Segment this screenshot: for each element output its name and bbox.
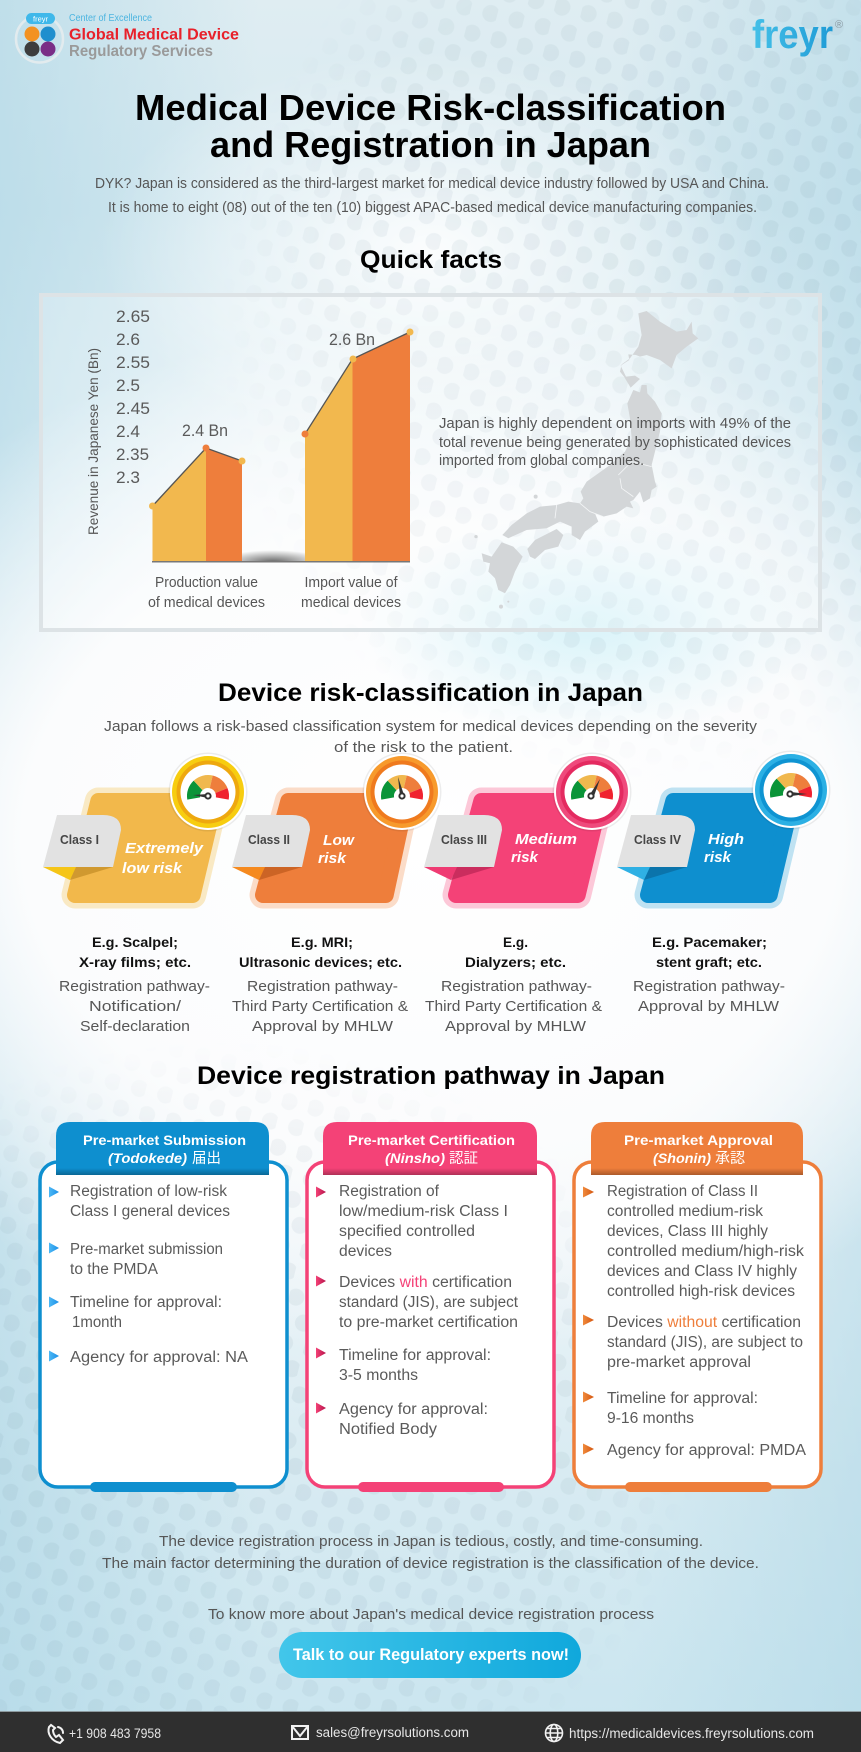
y axis ticks bbox=[116, 307, 150, 487]
intro text: It is home to eight (08) out of the ten (10) biggest APAC-based medical device manufacturing companies. bbox=[108, 199, 757, 216]
header: Pre-market Submission bbox=[83, 1132, 246, 1148]
closing text: The device registration process in Japan is tedious, costly, and time-consuming. bbox=[159, 1533, 703, 1550]
call to action text: To know more about Japan's medical device registration process bbox=[208, 1606, 654, 1623]
import dependence text bbox=[439, 415, 791, 469]
closing text bbox=[102, 1533, 759, 1572]
y axis ticks: 2.4 bbox=[116, 422, 140, 441]
risk label: Low bbox=[323, 832, 355, 849]
tab: Class II: Class II bbox=[248, 833, 290, 847]
button: talk to experts: Talk to our Regulatory experts now! bbox=[293, 1645, 569, 1664]
x axis labels: of medical devices bbox=[148, 594, 265, 611]
bars: production value bbox=[149, 421, 246, 562]
class I details: E.g. Scalpel; bbox=[92, 934, 178, 950]
list: 3-5 months bbox=[339, 1367, 418, 1384]
x axis labels bbox=[148, 574, 401, 611]
tab: Class II bbox=[232, 815, 310, 867]
class II details: E.g. MRI; bbox=[291, 934, 353, 950]
header: Pre-market Certification bbox=[348, 1132, 515, 1148]
heading: quick facts: Quick facts bbox=[360, 246, 502, 274]
panel: pre-market approval bbox=[574, 1122, 821, 1492]
list: devices, Class III highly bbox=[607, 1223, 768, 1240]
risk label: risk bbox=[511, 849, 539, 866]
class III details: Approval by MHLW bbox=[445, 1018, 587, 1035]
website: https://medicaldevices.freyrsolutions.com bbox=[569, 1726, 814, 1741]
closing text: The main factor determining the duration of device registration is the classification of the device. bbox=[102, 1555, 759, 1572]
panel: pre-market certification bbox=[307, 1122, 554, 1492]
y axis title: Revenue in Japanese Yen (Bn) bbox=[86, 348, 101, 535]
tab: Class III bbox=[424, 815, 502, 867]
logo: freyr: freyr bbox=[752, 13, 833, 57]
icon: gauge bbox=[362, 752, 442, 832]
panel: pre-market submission bbox=[40, 1122, 287, 1492]
class I details: Notification/ bbox=[89, 998, 182, 1015]
icon: gauge bbox=[752, 750, 830, 830]
x axis labels: medical devices bbox=[301, 594, 401, 611]
list: devices and Class IV highly bbox=[607, 1263, 797, 1280]
class IV details: Registration pathway- bbox=[633, 978, 785, 995]
icon: phone bbox=[48, 1725, 63, 1743]
risk-classification description: of the risk to the patient. bbox=[334, 739, 513, 756]
tab: Class IV bbox=[617, 815, 695, 867]
list: pre-market approval bbox=[607, 1354, 751, 1371]
list: Notified Body bbox=[339, 1421, 437, 1438]
class I details bbox=[59, 934, 210, 1035]
header: 届出 bbox=[192, 1150, 221, 1167]
class III details bbox=[425, 934, 602, 1035]
class II details bbox=[232, 934, 408, 1035]
list: Registration of Class II bbox=[607, 1183, 758, 1200]
risk label bbox=[318, 832, 355, 867]
header: (Ninsho) bbox=[385, 1150, 445, 1166]
list bbox=[316, 1183, 519, 1438]
risk-classification description bbox=[104, 718, 758, 756]
icon: gauge bbox=[552, 752, 632, 832]
class I details: X-ray films; etc. bbox=[79, 954, 191, 970]
list: Timeline for approval: bbox=[70, 1294, 222, 1311]
email address: sales@freyrsolutions.com bbox=[316, 1725, 469, 1740]
intro text: DYK? Japan is considered as the third-largest market for medical device industry followed by USA and China. bbox=[95, 175, 769, 192]
list: 1month bbox=[72, 1314, 122, 1331]
risk card: Class IV bbox=[617, 750, 830, 895]
header: Pre-market Approval bbox=[624, 1132, 773, 1148]
icon: gauge bbox=[168, 752, 248, 832]
list: Registration of low-risk bbox=[70, 1183, 227, 1200]
risk label: Extremely bbox=[125, 840, 204, 857]
list bbox=[49, 1183, 249, 1366]
map of Japan bbox=[474, 311, 698, 609]
list: Agency for approval: NA bbox=[70, 1349, 249, 1366]
tab: Class I: Class I bbox=[60, 833, 99, 847]
list: Registration of bbox=[339, 1183, 440, 1200]
list: Pre-market submission bbox=[70, 1241, 223, 1258]
class I details: Registration pathway- bbox=[59, 978, 210, 995]
class I details: Self-declaration bbox=[80, 1018, 190, 1035]
y axis ticks: 2.65 bbox=[116, 307, 150, 326]
panel: quick facts bbox=[41, 295, 820, 630]
x axis labels: Import value of bbox=[304, 574, 398, 591]
header bbox=[56, 1122, 269, 1175]
risk label: risk bbox=[704, 849, 732, 866]
footer bbox=[0, 1711, 861, 1752]
class III details: Third Party Certification & bbox=[425, 998, 602, 1015]
button: talk to experts bbox=[279, 1632, 581, 1678]
class II details: Approval by MHLW bbox=[252, 1018, 394, 1035]
title: and Registration in Japan bbox=[210, 124, 651, 165]
logo: Global Medical Device Regulatory Services: freyr bbox=[33, 16, 49, 24]
heading: device risk-classification: Device risk-classification in Japan bbox=[218, 679, 643, 707]
header: 承認 bbox=[715, 1150, 746, 1167]
list: Agency for approval: bbox=[339, 1401, 488, 1418]
bar chart: revenue bbox=[86, 307, 414, 611]
y axis ticks: 2.55 bbox=[116, 353, 150, 372]
logo: Global Medical Device Regulatory Services: Regulatory Services bbox=[69, 43, 213, 60]
bars: import value: 2.6 Bn bbox=[329, 330, 375, 349]
list: Devices without certification bbox=[607, 1314, 801, 1331]
import dependence text: total revenue being generated by sophisticated devices bbox=[439, 434, 791, 451]
import dependence text: Japan is highly dependent on imports with 49% of the bbox=[439, 415, 791, 432]
class III details: Dialyzers; etc. bbox=[465, 954, 566, 970]
risk card: Class III bbox=[424, 752, 632, 895]
list: Timeline for approval: bbox=[339, 1347, 491, 1364]
header: (Shonin) bbox=[653, 1150, 711, 1166]
class IV details bbox=[633, 934, 785, 1015]
header: (Todokede) bbox=[108, 1150, 187, 1166]
import dependence text: imported from global companies. bbox=[439, 452, 644, 469]
risk label bbox=[122, 840, 204, 877]
list: low/medium-risk Class I bbox=[339, 1203, 508, 1220]
logo: Global Medical Device Regulatory Services: Global Medical Device bbox=[69, 26, 239, 44]
y axis ticks: 2.35 bbox=[116, 445, 149, 464]
class IV details: stent graft; etc. bbox=[656, 954, 762, 970]
list: Agency for approval: PMDA bbox=[607, 1442, 807, 1459]
header bbox=[323, 1122, 537, 1175]
risk card: Class I bbox=[43, 752, 248, 895]
list: controlled medium-risk bbox=[607, 1203, 763, 1220]
tab: Class III: Class III bbox=[441, 833, 487, 847]
list: 9-16 months bbox=[607, 1410, 694, 1427]
risk label bbox=[704, 831, 744, 866]
class IV details: Approval by MHLW bbox=[638, 998, 780, 1015]
class III details: Registration pathway- bbox=[441, 978, 592, 995]
logo: Global Medical Device Regulatory Services bbox=[16, 13, 239, 62]
risk label: High bbox=[708, 831, 744, 848]
intro text bbox=[95, 175, 769, 216]
y axis ticks: 2.5 bbox=[116, 376, 140, 395]
icon: email bbox=[292, 1726, 308, 1739]
bars: production value: 2.4 Bn bbox=[182, 421, 228, 440]
title: Medical Device Risk-classification bbox=[135, 87, 726, 128]
list bbox=[583, 1183, 807, 1459]
list: devices bbox=[339, 1243, 392, 1260]
header: 認証 bbox=[449, 1151, 478, 1167]
class IV details: E.g. Pacemaker; bbox=[652, 934, 767, 950]
list: controlled medium/high-risk bbox=[607, 1243, 804, 1260]
list: standard (JIS), are subject to bbox=[607, 1334, 803, 1351]
logo: freyr: ® bbox=[835, 19, 843, 31]
list: to the PMDA bbox=[70, 1261, 159, 1278]
class II details: Registration pathway- bbox=[247, 978, 398, 995]
title bbox=[135, 87, 726, 165]
y axis ticks: 2.3 bbox=[116, 468, 140, 487]
heading: device registration pathway: Device registration pathway in Japan bbox=[197, 1062, 665, 1090]
class II details: Third Party Certification & bbox=[232, 998, 408, 1015]
risk label bbox=[511, 831, 577, 866]
list: to pre-market certification bbox=[339, 1314, 518, 1331]
header bbox=[591, 1122, 803, 1175]
risk label: Medium bbox=[515, 831, 577, 848]
list: specified controlled bbox=[339, 1223, 475, 1240]
class II details: Ultrasonic devices; etc. bbox=[239, 954, 402, 970]
y axis ticks: 2.45 bbox=[116, 399, 150, 418]
list: Devices with certification bbox=[339, 1274, 512, 1291]
list: Class I general devices bbox=[70, 1203, 230, 1220]
list: standard (JIS), are subject bbox=[339, 1294, 519, 1311]
tab: Class IV: Class IV bbox=[634, 833, 682, 847]
y axis ticks: 2.6 bbox=[116, 330, 140, 349]
list: Timeline for approval: bbox=[607, 1390, 758, 1407]
risk label: risk bbox=[318, 850, 347, 867]
icon: globe bbox=[546, 1724, 562, 1742]
risk card: Class II bbox=[232, 752, 442, 895]
tab: Class I bbox=[43, 815, 121, 867]
risk-classification description: Japan follows a risk-based classification system for medical devices depending on the severity bbox=[104, 718, 758, 735]
class III details: E.g. bbox=[503, 934, 528, 950]
x axis labels: Production value bbox=[155, 574, 258, 591]
risk label: low risk bbox=[122, 860, 183, 877]
bars: import value bbox=[302, 328, 414, 562]
logo: Global Medical Device Regulatory Services: Center of Excellence bbox=[69, 13, 152, 24]
list: controlled high-risk devices bbox=[607, 1283, 795, 1300]
phone number: +1 908 483 7958 bbox=[69, 1726, 161, 1741]
